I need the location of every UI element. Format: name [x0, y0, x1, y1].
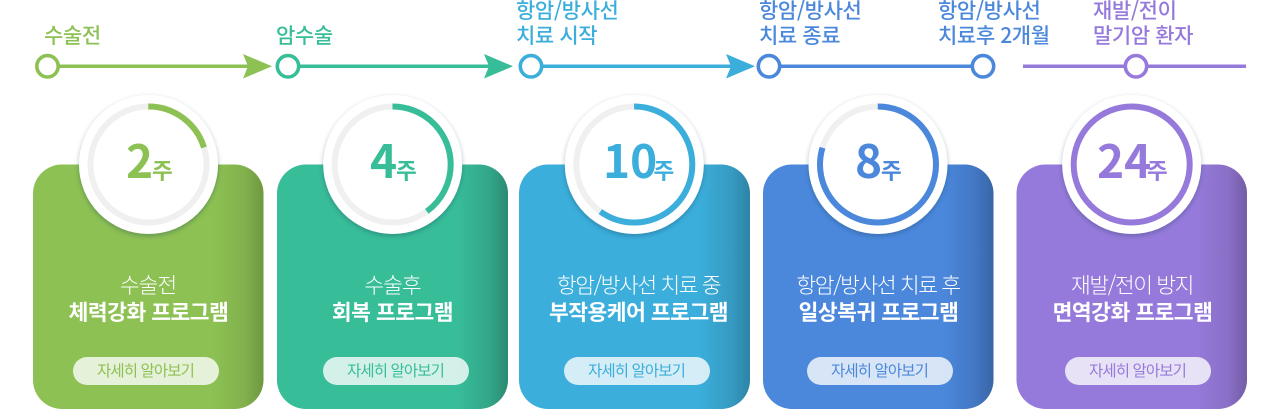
stage: recurrence/metastasis: 말기암 환자	[1093, 20, 1193, 50]
panel: 4 weeks program	[277, 95, 508, 409]
stage: chemo/radiation start	[516, 0, 755, 78]
panel: 4 weeks program: 자세히 알아보기	[347, 359, 444, 381]
stage: chemo/radiation end: 치료 종료	[759, 20, 840, 50]
panel: 24 weeks program: 주	[1147, 154, 1168, 186]
stage: pre-surgery	[37, 20, 272, 78]
stage: two months after treatment	[938, 0, 1050, 77]
panel: 8 weeks program: 항암/방사선 치료 후	[796, 269, 960, 300]
panel: 10 weeks program	[519, 95, 750, 409]
stage: two months after treatment: 치료후 2개월	[938, 20, 1050, 50]
panel: 4 weeks program: 수술후	[364, 269, 421, 300]
stage: recurrence/metastasis	[1023, 0, 1246, 77]
panel: 10 weeks program: 부작용케어 프로그램	[549, 296, 728, 327]
panel: 8 weeks program: 일상복귀 프로그램	[799, 296, 958, 327]
panel: 10 weeks program: 자세히 알아보기	[588, 359, 685, 381]
panel: 2 weeks program	[33, 95, 264, 409]
panel: 24 weeks program: 재발/전이 방지	[1071, 269, 1193, 300]
panel: 4 weeks program: 회복 프로그램	[332, 296, 453, 327]
panel: 2 weeks program: 수술전	[120, 269, 176, 300]
panel: 10 weeks program: 주	[654, 154, 674, 186]
panel: 2 weeks program: 체력강화 프로그램	[69, 296, 228, 327]
panel: 4 weeks program: 주	[396, 154, 417, 186]
panel: 2 weeks program: 자세히 알아보기	[97, 359, 194, 381]
panel: 8 weeks program: 자세히 알아보기	[831, 359, 928, 381]
panel: 24 weeks program: 자세히 알아보기	[1089, 359, 1186, 381]
stage: chemo/radiation end	[758, 0, 972, 77]
stage: surgery	[276, 20, 513, 78]
panel: 24 weeks program: 24	[1097, 126, 1151, 192]
panel: 10 weeks program: 항암/방사선 치료 중	[557, 269, 721, 300]
stage: pre-surgery: 수술전	[44, 20, 101, 50]
panel: 24 weeks program	[1016, 95, 1247, 409]
panel: 10 weeks program: 10	[603, 126, 657, 192]
stage: surgery: 암수술	[276, 20, 333, 50]
stage: chemo/radiation start: 치료 시작	[516, 20, 597, 50]
panel: 2 weeks program: 주	[152, 154, 173, 186]
panel: 8 weeks program: 주	[881, 154, 902, 186]
panel: 8 weeks program	[763, 95, 994, 409]
panel: 24 weeks program: 면역강화 프로그램	[1053, 296, 1212, 327]
panel: 2 weeks program: 2	[126, 126, 153, 192]
panel: 8 weeks program: 8	[855, 126, 882, 192]
panel: 4 weeks program: 4	[370, 126, 397, 192]
timeline	[37, 0, 1246, 78]
